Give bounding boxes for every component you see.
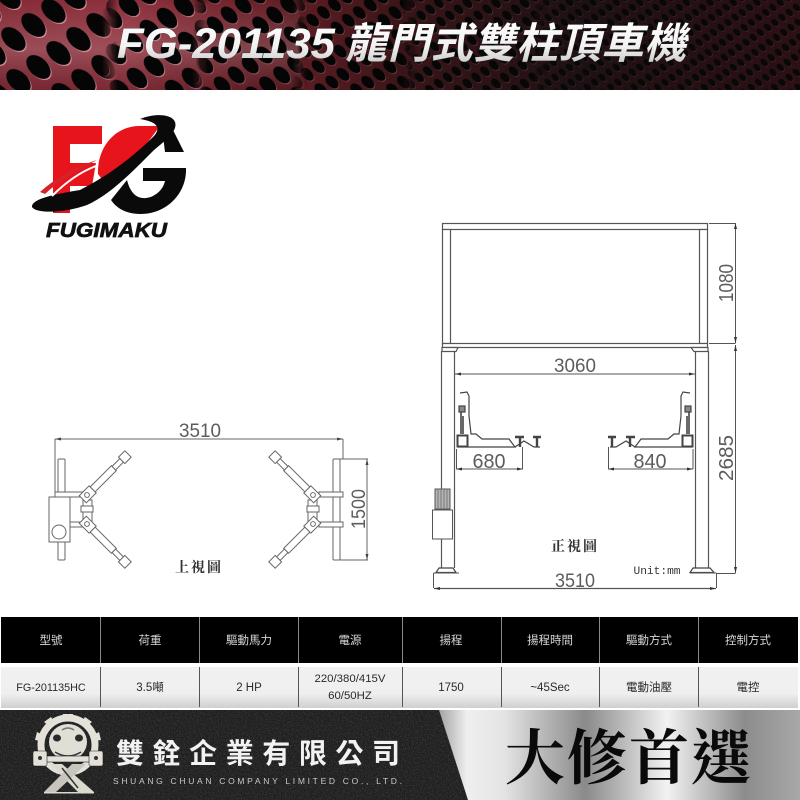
title: 龍門式雙柱頂車機 — [345, 20, 691, 67]
slogan: 大修首選 — [505, 726, 756, 792]
table data row: 電控 — [736, 680, 760, 694]
unit note: Unit:mm — [634, 566, 681, 578]
company name in Chinese: 雙銓企業有限公司 — [116, 738, 400, 769]
banner: perforated metal header — [0, 0, 800, 90]
dimension: 2685: 2685 — [716, 435, 738, 481]
emblem: turtle gear and pistons — [33, 714, 103, 794]
logo letter G black — [111, 130, 186, 214]
base plates — [436, 568, 714, 572]
table data row: 2 HP — [236, 682, 262, 694]
caption: front view: 正視圖 — [551, 538, 599, 555]
table data row: 3.5噸 — [136, 680, 164, 694]
dimension: 840 — [608, 447, 693, 473]
motor and pump — [432, 489, 452, 539]
left carriage — [458, 392, 541, 447]
logo wordmark: FUGIMAKU — [46, 220, 168, 242]
table header row: 驅動馬力 — [226, 633, 272, 647]
right column assembly — [307, 459, 343, 560]
caption: top view: 上視圖 — [175, 559, 223, 576]
dimension: 3060: 3060 — [554, 356, 596, 377]
table header row: 型號 — [40, 633, 63, 647]
table data row: ~45Sec — [530, 682, 570, 694]
left lift arms — [79, 450, 132, 569]
dimension: 3510 base: 3510 — [555, 571, 595, 592]
footer: company band — [0, 710, 800, 800]
left column assembly — [49, 459, 93, 560]
table data row: 1750 — [438, 682, 464, 694]
dimension: 3510 base — [434, 571, 716, 592]
footer silver panel — [430, 710, 800, 800]
dimension: width 3510: 3510 — [179, 421, 221, 442]
right carriage — [608, 392, 692, 447]
table data row — [1, 667, 798, 708]
dimension: 1080 — [709, 223, 738, 344]
drawing: top view — [49, 421, 370, 576]
dimension: depth 1500: 1500 — [349, 489, 370, 529]
dimension: 840: 840 — [634, 451, 666, 473]
left post — [442, 351, 454, 568]
table data row: 220/380/415V — [315, 673, 386, 685]
logo letter G red arc — [98, 126, 160, 182]
table data row: 電動油壓 — [626, 680, 672, 694]
emblem turtle head — [49, 724, 87, 760]
specification table — [1, 617, 798, 708]
logo: Fugimaku FG — [32, 115, 186, 242]
emblem crossed X and spanners — [44, 764, 94, 794]
drawing: front view — [432, 223, 738, 592]
table header row: 電源 — [338, 633, 362, 647]
title: FG-201135 — [117, 20, 336, 68]
floor outline — [434, 573, 716, 588]
dimension: 1080: 1080 — [716, 264, 738, 302]
table header row: 揚程 — [440, 634, 462, 647]
right post — [696, 351, 708, 568]
table data row: FG-201135HC — [16, 682, 86, 694]
logo letter F — [53, 126, 102, 213]
top beam frame — [442, 224, 708, 352]
table header row: 控制方式 — [725, 633, 771, 647]
dimension: 680: 680 — [472, 451, 506, 473]
table header row: 驅動方式 — [626, 633, 672, 647]
dimension: 2685 — [716, 345, 738, 574]
table header row — [1, 617, 798, 663]
table header row: 荷重 — [138, 633, 162, 647]
dimension: 3060 — [455, 356, 695, 377]
dimension: 680 — [456, 447, 523, 473]
emblem pistons — [33, 751, 103, 766]
dimension: depth 1500 — [340, 459, 370, 560]
title — [117, 20, 691, 68]
table header row: 揚程時間 — [527, 634, 573, 647]
logo swoosh — [32, 115, 175, 212]
company name in English: SHUANG CHUAN COMPANY LIMITED CO., LTD. — [113, 776, 402, 786]
table data row: 60/50HZ — [328, 690, 372, 702]
emblem gear — [35, 714, 101, 772]
footer leather panel — [0, 710, 468, 800]
dimension: width 3510 — [55, 421, 343, 497]
right lift arms — [268, 450, 321, 569]
logo accent lines — [40, 160, 97, 194]
